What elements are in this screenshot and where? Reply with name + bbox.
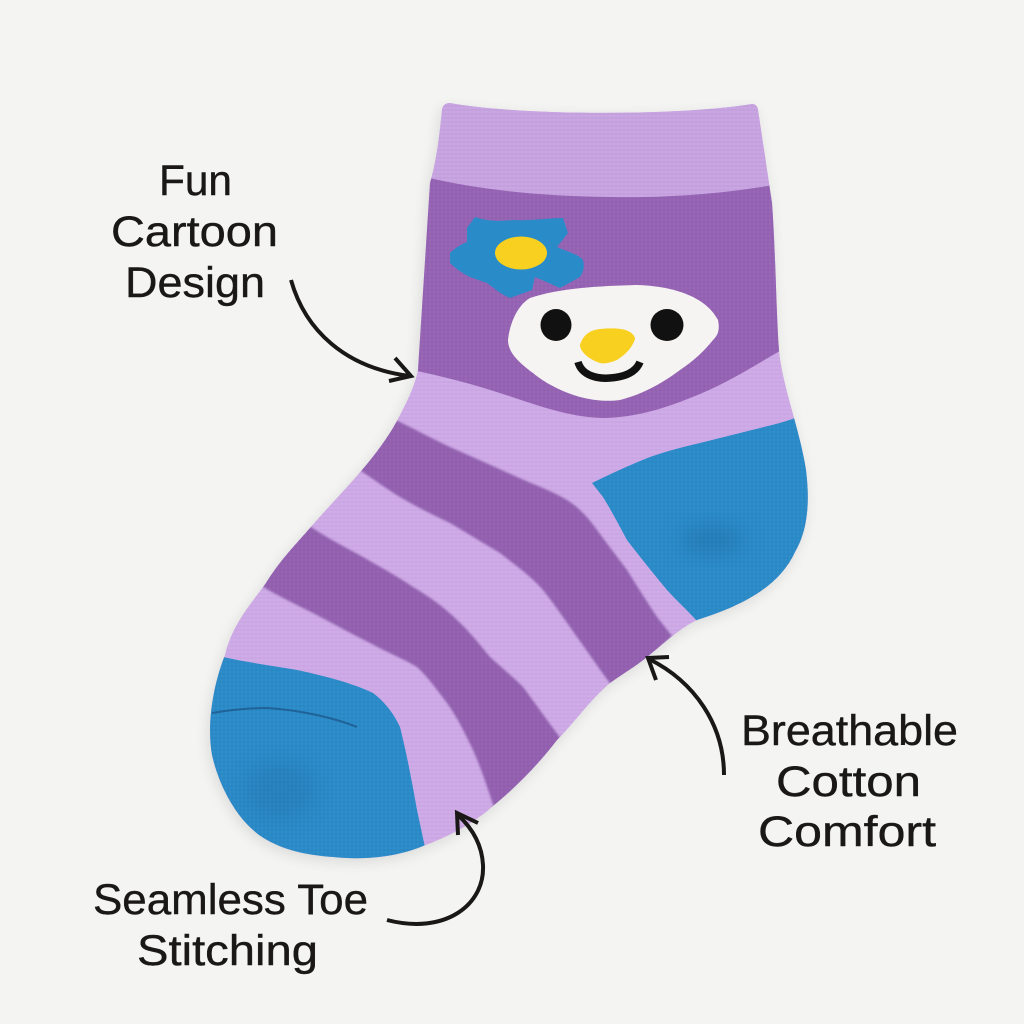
label: breathable cotton comfort: Breathable xyxy=(741,707,958,755)
flower centre xyxy=(495,236,547,270)
mouth xyxy=(578,362,640,378)
left eye xyxy=(540,309,572,341)
right eye xyxy=(650,309,684,341)
label: seamless toe stitching: Seamless Toe xyxy=(93,876,368,924)
toe xyxy=(210,657,425,858)
leg dark purple band xyxy=(412,177,785,418)
label: breathable cotton comfort: Comfort xyxy=(758,808,936,856)
icon: cartoon face xyxy=(508,285,719,401)
label: fun cartoon design xyxy=(111,157,278,307)
knit texture xyxy=(210,106,808,858)
label: fun cartoon design: Cartoon xyxy=(111,208,278,256)
toe seam xyxy=(212,708,357,727)
label: seamless toe stitching xyxy=(93,876,368,975)
icon: flower xyxy=(450,217,584,298)
heel xyxy=(592,418,830,621)
sock shadow xyxy=(208,107,806,862)
arrow: to cotton xyxy=(648,657,724,775)
label: fun cartoon design: Design xyxy=(125,259,265,307)
toe shading xyxy=(252,767,308,814)
label: breathable cotton comfort: Cotton xyxy=(776,758,921,806)
arrow: to cartoon design xyxy=(291,280,411,381)
foot stripe two xyxy=(260,525,562,810)
label: breathable cotton comfort xyxy=(741,707,958,856)
sock base light lilac xyxy=(210,103,808,858)
label: fun cartoon design: Fun xyxy=(159,157,232,205)
arrow: to toe xyxy=(387,813,483,924)
nose xyxy=(580,328,635,363)
label: seamless toe stitching: Stitching xyxy=(137,927,318,975)
foot stripe one xyxy=(358,420,672,686)
sock illustration xyxy=(210,103,808,858)
heel fold shading xyxy=(686,526,738,554)
cuff band xyxy=(431,103,770,186)
